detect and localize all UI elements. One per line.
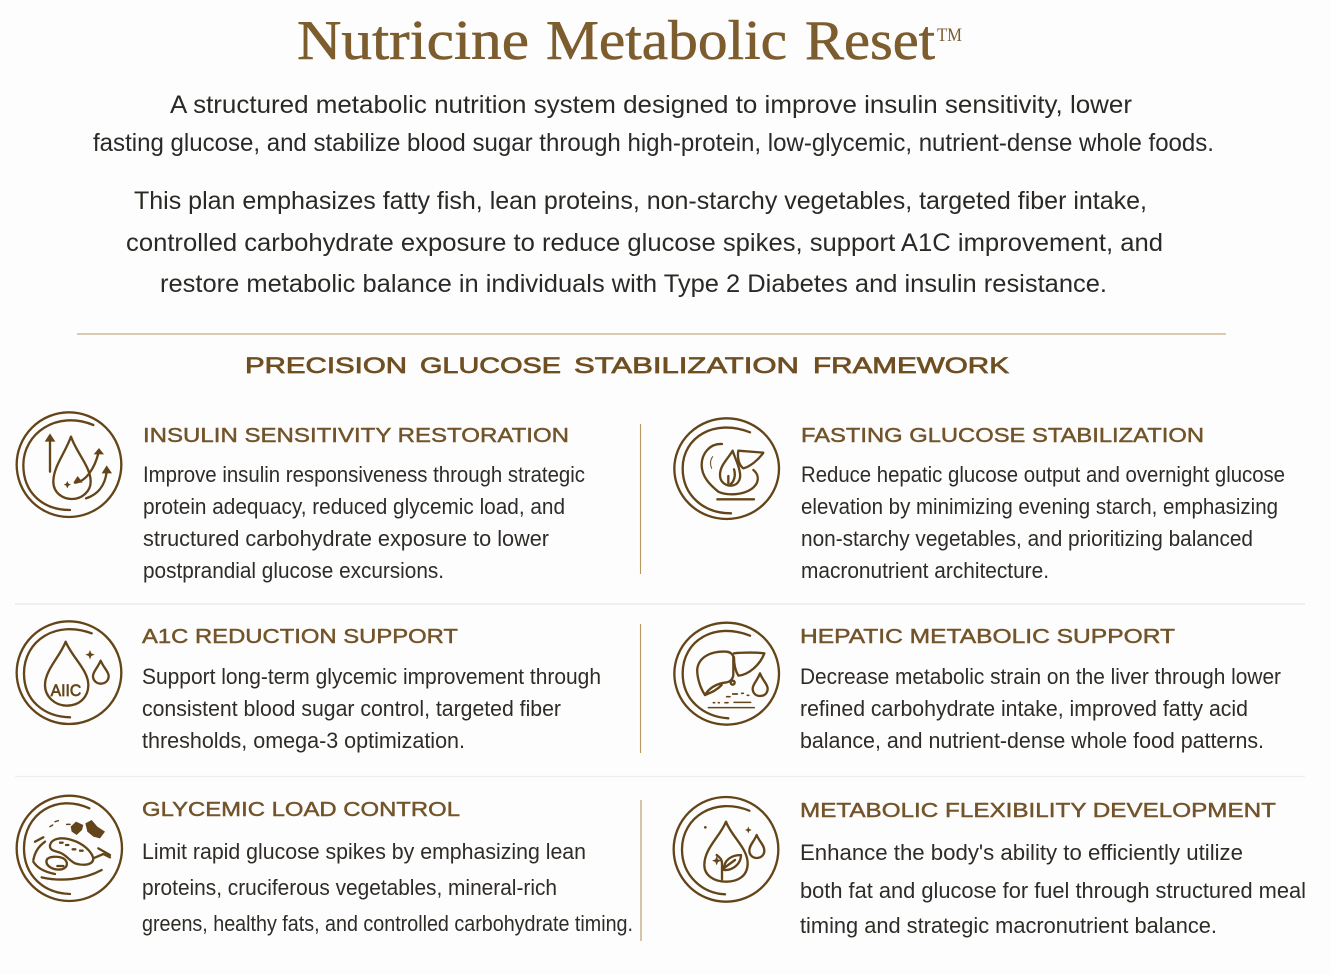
body text: Support long-term glycemic improvement through [142,664,601,689]
body text: refined carbohydrate intake, improved fatty acid [800,696,1248,721]
title: TM [937,25,962,46]
icon: liver and drop [674,623,779,725]
heading: HEPATIC METABOLIC SUPPORT [800,626,1175,648]
body text: greens, healthy fats, and controlled carbohydrate timing. [142,911,633,936]
body text [801,462,1285,583]
intro paragraph 2: controlled carbohydrate exposure to reduce glucose spikes, support A1C improvement, and [126,229,1163,257]
framework heading [245,353,1009,378]
body text: proteins, cruciferous vegetables, mineral-rich [142,875,557,900]
body text: structured carbohydrate exposure to lower [143,526,549,551]
body text: Limit rapid glucose spikes by emphasizing lean [142,839,586,864]
body text: Decrease metabolic strain on the liver through lower [800,664,1281,689]
title: Reset [805,10,935,72]
body text: Enhance the body's ability to efficiently utilize [800,840,1243,865]
panel: fasting glucose stabilization [674,418,1285,583]
panel: hepatic metabolic support [674,623,1281,753]
icon: A1C drop: AIIC [51,681,81,700]
heading: GLYCEMIC LOAD CONTROL [142,799,460,821]
body text: elevation by minimizing evening starch, emphasizing [801,494,1278,519]
intro paragraph 1: A structured metabolic nutrition system designed to improve insulin sensitivity, lower [170,91,1132,119]
framework heading: STABILIZATION [574,353,799,378]
body text [800,840,1306,938]
icon: stomach and drop [674,418,779,519]
panel: metabolic flexibility development [674,797,1306,938]
body text: Reduce hepatic glucose output and overnight glucose [801,462,1285,487]
title: Metabolic [546,10,787,72]
panel: glycemic load control [17,796,633,936]
intro paragraph 2 [126,187,1163,298]
icon: drop with leaf [674,797,778,902]
body text: non-starchy vegetables, and prioritizing balanced [801,526,1253,551]
framework heading: PRECISION [245,353,407,378]
framework heading: GLUCOSE [420,353,561,378]
panel: A1C reduction support [17,621,601,753]
heading: FASTING GLUCOSE STABILIZATION [801,425,1204,447]
body text: Improve insulin responsiveness through strategic [143,462,585,487]
body text: both fat and glucose for fuel through structured meal [800,878,1306,903]
intro paragraph 1 [93,91,1214,157]
title: Nutricine [297,10,529,72]
body text: protein adequacy, reduced glycemic load, and [143,494,565,519]
intro paragraph 1: fasting glucose, and stabilize blood sugar through high-protein, low-glycemic, nutrient-dense whole foods. [93,129,1214,157]
panel: insulin sensitivity restoration [17,412,585,583]
body text [142,664,601,753]
body text [800,664,1281,753]
body text [142,839,633,936]
heading: METABOLIC FLEXIBILITY DEVELOPMENT [800,800,1276,822]
framework heading: FRAMEWORK [813,353,1009,378]
body text: timing and strategic macronutrient balance. [800,913,1217,938]
intro paragraph 2: restore metabolic balance in individuals with Type 2 Diabetes and insulin resistance. [160,270,1107,298]
icon: plate of food [17,796,122,901]
icon: drop with rising arrows [17,412,121,517]
heading: INSULIN SENSITIVITY RESTORATION [143,425,569,447]
title [297,10,962,72]
intro paragraph 2: This plan emphasizes fatty fish, lean proteins, non-starchy vegetables, targeted fiber intake, [134,187,1147,215]
body text: consistent blood sugar control, targeted fiber [142,696,561,721]
heading: A1C REDUCTION SUPPORT [142,626,458,648]
icon: A1C drop [17,621,121,724]
body text: balance, and nutrient-dense whole food patterns. [800,728,1264,753]
body text: thresholds, omega-3 optimization. [142,728,465,753]
body text: postprandial glucose excursions. [143,558,444,583]
body text: macronutrient architecture. [801,558,1049,583]
body text [143,462,585,583]
